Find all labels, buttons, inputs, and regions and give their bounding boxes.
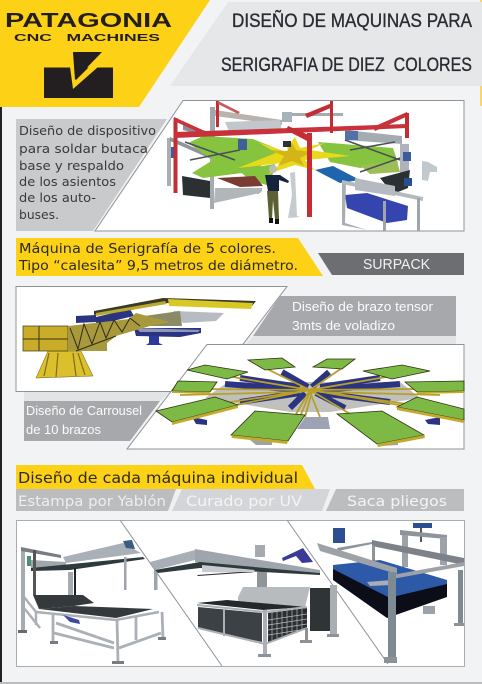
label: tensor arm: 3mts de voladizo bbox=[292, 319, 395, 333]
panel: ten-colour machine render bbox=[95, 100, 464, 231]
text block: buses. bbox=[19, 208, 59, 222]
process label: sheet removal: Saca pliegos bbox=[347, 494, 447, 510]
text block: de los asientos bbox=[19, 175, 116, 189]
SURPACK label bbox=[318, 253, 464, 275]
process label: stamping: Estampa por Yablón bbox=[18, 494, 166, 510]
yellow banner: individual machines: Diseño de cada máquina individual bbox=[18, 469, 298, 487]
panel: individual machines bbox=[16, 520, 464, 666]
label: carousel: de 10 brazos bbox=[26, 423, 101, 437]
label: tensor arm: Diseño de brazo tensor bbox=[292, 300, 433, 314]
label: carousel bbox=[24, 401, 160, 441]
text block: de los auto- bbox=[19, 191, 96, 205]
icon: logo mark bbox=[44, 52, 113, 98]
text block bbox=[19, 124, 156, 222]
header: grey title panel bbox=[170, 2, 482, 86]
arm illustration bbox=[23, 298, 256, 378]
panel: tensor arm bbox=[16, 286, 287, 392]
label: carousel: Diseño de Carrousel bbox=[26, 404, 142, 418]
yellow banner: machine type: Tipo “calesita” 9,5 metros de diámetro. bbox=[18, 258, 298, 274]
yellow banner: machine type: Máquina de Serigrafía de 5 colores. bbox=[19, 241, 276, 257]
machine: UV curing unit bbox=[150, 545, 339, 657]
grey process bar bbox=[16, 489, 464, 511]
panel: device description bbox=[16, 119, 167, 231]
text block: Diseño de dispositivo bbox=[19, 124, 156, 138]
carousel illustration bbox=[156, 358, 464, 447]
yellow banner: individual machines bbox=[16, 465, 315, 489]
process label: UV curing: Curado por UV bbox=[186, 494, 302, 510]
logo subtitle: CNC MACHINES bbox=[14, 32, 160, 44]
panel: carousel bbox=[127, 344, 464, 449]
logo wordmark: PATAGONIA bbox=[5, 10, 172, 32]
yellow banner: machine type bbox=[16, 238, 323, 276]
machine: sheet stacker bbox=[317, 523, 464, 663]
machine: screen print table bbox=[18, 540, 166, 664]
header: yellow logo panel bbox=[0, 0, 210, 107]
SURPACK label: SURPACK bbox=[363, 256, 430, 273]
person bbox=[265, 165, 289, 224]
text block: base y respaldo bbox=[19, 159, 124, 173]
label: tensor arm bbox=[253, 296, 456, 336]
text block: para soldar butaca bbox=[19, 142, 148, 156]
machine illustration bbox=[167, 101, 437, 231]
